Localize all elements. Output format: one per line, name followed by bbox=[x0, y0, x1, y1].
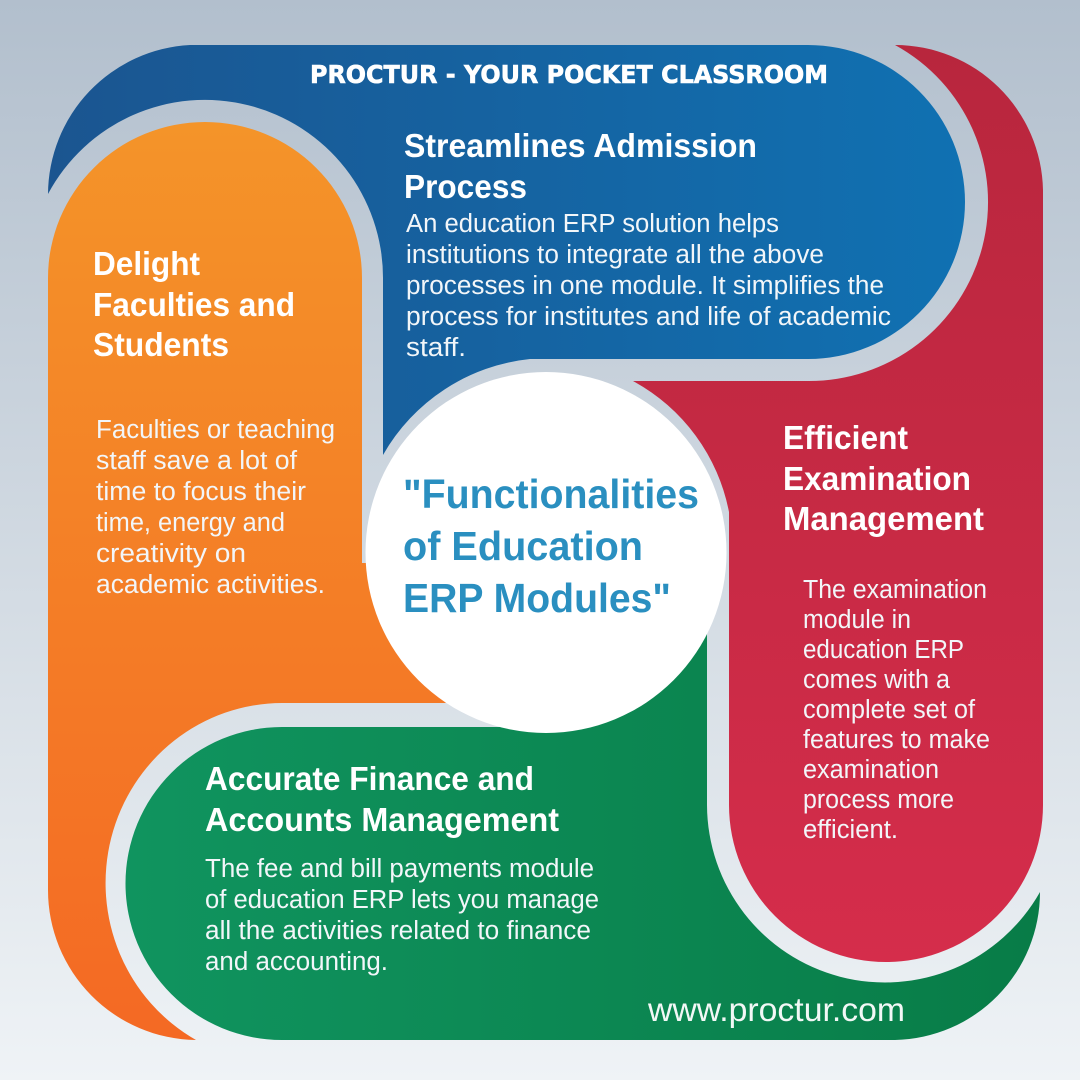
text: examination body: comes with a bbox=[803, 666, 951, 694]
heading: admission: Process bbox=[404, 168, 527, 205]
heading: faculties: Students bbox=[93, 326, 229, 363]
heading: faculties: Delight bbox=[93, 245, 200, 282]
text: examination body: process more bbox=[803, 786, 954, 814]
text: faculties body: creativity on bbox=[96, 540, 246, 568]
center circle with title: of Education bbox=[403, 523, 643, 569]
heading: faculties bbox=[93, 245, 295, 363]
text: faculties body: time to focus their bbox=[96, 478, 307, 506]
heading: examination: Efficient bbox=[783, 419, 908, 456]
text: admission body: staff. bbox=[406, 334, 466, 362]
center circle with title bbox=[366, 372, 726, 733]
heading: examination: Examination bbox=[783, 460, 971, 497]
text: admission body: process for institutes and life of academic bbox=[406, 303, 891, 331]
text: examination body: features to make bbox=[803, 726, 990, 754]
heading: finance: Accounts Management bbox=[205, 801, 559, 838]
heading: finance: Accurate Finance and bbox=[205, 760, 534, 797]
text: finance body: and accounting. bbox=[205, 948, 388, 976]
panel: faculties (orange) bbox=[48, 122, 446, 1040]
text: examination body: The examination bbox=[803, 576, 987, 604]
text: examination body: education ERP bbox=[803, 636, 964, 664]
text: finance body bbox=[205, 855, 599, 976]
center circle with title: "Functionalities bbox=[403, 471, 699, 517]
center circle with title: ERP Modules" bbox=[403, 575, 671, 621]
heading: faculties: Faculties and bbox=[93, 286, 295, 323]
text: faculties body: time, energy and bbox=[96, 509, 285, 537]
text: examination body: examination bbox=[803, 756, 939, 784]
heading: admission: Streamlines Admission bbox=[404, 127, 757, 164]
text: finance body: of education ERP lets you manage bbox=[205, 886, 599, 914]
heading: admission bbox=[404, 127, 757, 205]
banner title: PROCTUR - YOUR POCKET CLASSROOM bbox=[310, 60, 828, 89]
heading: examination: Management bbox=[783, 500, 984, 537]
text: admission body: An education ERP solution helps bbox=[406, 210, 779, 238]
heading: finance bbox=[205, 760, 559, 838]
website url: www.proctur.com bbox=[647, 991, 905, 1028]
text: finance body: The fee and bill payments module bbox=[205, 855, 594, 883]
panel: admission (blue) bbox=[48, 45, 965, 455]
text: examination body bbox=[803, 576, 990, 844]
text: faculties body: staff save a lot of bbox=[96, 447, 298, 475]
text: admission body: processes in one module. It simplifies the bbox=[406, 272, 884, 300]
heading: examination bbox=[783, 419, 984, 537]
text: examination body: complete set of bbox=[803, 696, 976, 724]
text: faculties body: Faculties or teaching bbox=[96, 416, 335, 444]
text: finance body: all the activities related to finance bbox=[205, 917, 591, 945]
text: admission body bbox=[406, 210, 891, 362]
panel: finance (green) bbox=[126, 600, 1040, 1040]
text: admission body: institutions to integrate all the above bbox=[406, 241, 824, 269]
text: faculties body bbox=[96, 416, 335, 599]
text: examination body: efficient. bbox=[803, 816, 898, 844]
panel: examination (red) bbox=[633, 45, 1043, 962]
text: examination body: module in bbox=[803, 606, 911, 634]
text: faculties body: academic activities. bbox=[96, 571, 325, 599]
